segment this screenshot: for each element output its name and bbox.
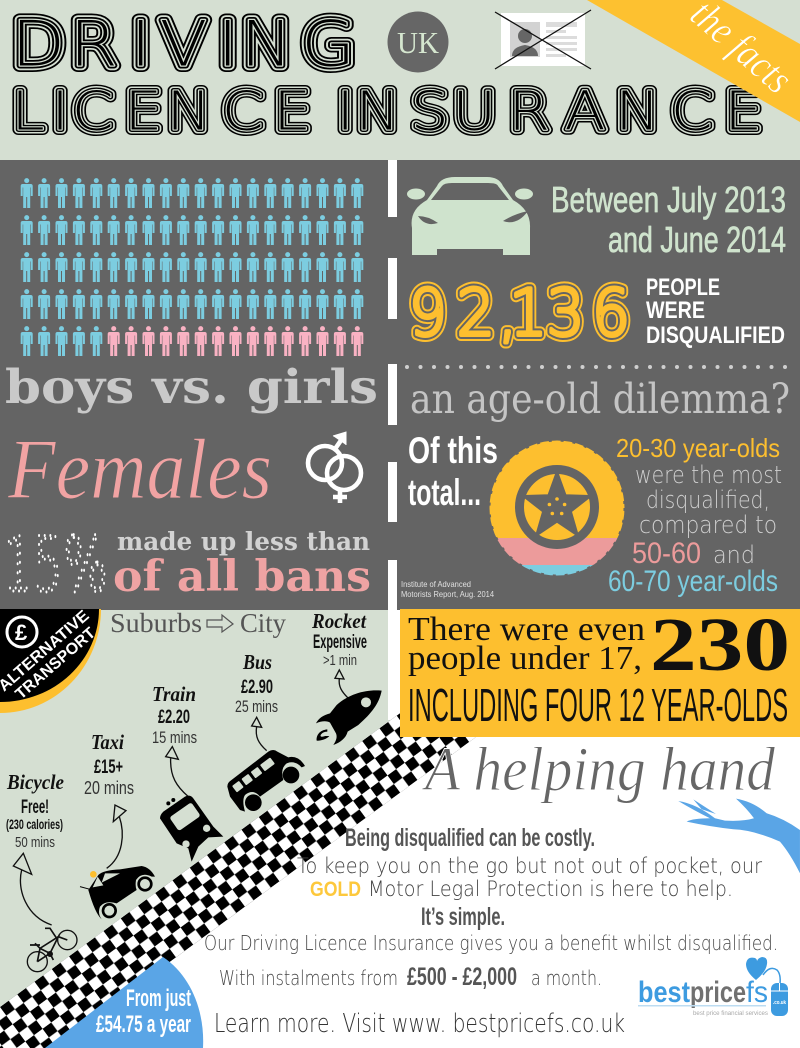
stat: 92,136: 92,136 (409, 276, 630, 351)
title: Licence Insurance: LICENCE INSURANCE (11, 81, 762, 143)
label: taxi: 20 mins (84, 778, 134, 798)
title: Driving: DRIVING (12, 8, 355, 81)
text: people were disqualified: PEOPLE (646, 274, 720, 301)
text: of this total (408, 430, 498, 513)
heading: suburbs to city (110, 608, 286, 638)
divider: dashed white (388, 160, 397, 610)
heading: a helping hand: A helping hand (421, 736, 776, 804)
text: gold motor legal protection: Motor Legal Protection is here to help. (368, 877, 733, 901)
title: Licence Insurance: LICENCE INSURANCE (11, 81, 762, 143)
logo: bestpricefs (638, 957, 788, 1017)
label: train: 15 mins (152, 729, 197, 747)
text: being disqualified can be costly: Being disqualified can be costly. (345, 824, 595, 852)
heading: boys vs. girls: boys vs. girls (5, 360, 378, 415)
text: 50-60 and: and (713, 541, 755, 569)
text: source citation (401, 579, 494, 599)
label: bus: Bus (242, 650, 272, 674)
banner: the facts (587, 0, 800, 122)
text: instalments: With instalments from (219, 966, 398, 990)
logo: bestpricefs: price (690, 976, 746, 1009)
text: were the most disqualified, compared to: disqualified, (646, 486, 770, 514)
text: 50-60 and: 50-60 (632, 537, 701, 570)
label: train: £2.20 (158, 707, 190, 728)
chart: pictogram of drivers by gender (21, 178, 363, 356)
text: people were disqualified: WERE (646, 297, 705, 324)
label: taxi (84, 730, 134, 798)
text: 50-60 and (632, 537, 755, 570)
logo: bestpricefs: .co.uk (773, 1000, 786, 1006)
badge: alternative transport: TRANSPORT (12, 624, 99, 703)
text: were the most disqualified, compared to: compared to (639, 511, 777, 539)
icon: bus (227, 750, 305, 812)
logo: bestpricefs: fs (746, 976, 768, 1009)
icon: blue hand (678, 799, 800, 873)
text: were the most disqualified, compared to (635, 461, 782, 539)
text: instalments: £500 - £2,000 (407, 963, 517, 991)
panel: white lower right background (0, 610, 800, 1048)
label: bus: £2.90 (241, 677, 273, 698)
icon: gender symbols (308, 432, 361, 503)
title: Driving: DRIVING (12, 8, 355, 81)
text: source citation: Motorists Report, Aug. 2014 (401, 589, 494, 599)
text: instalments: a month. (531, 966, 602, 990)
arrows: label pointers (13, 670, 348, 925)
title: Driving: DRIVING (12, 8, 355, 81)
text: learn more: Learn more. Visit www. bestpricefs.co.uk (214, 1009, 625, 1039)
stat: 15% dotted: 15% (3, 520, 108, 609)
text: it's simple: It’s simple. (421, 903, 505, 931)
icon: crossed-out licence card (495, 10, 591, 69)
stat: 92,136: 92,136 (409, 276, 630, 351)
text: source citation: Institute of Advanced (401, 579, 471, 589)
panel: yellow under-17 callout: people under 17, (408, 640, 642, 677)
text: to keep you on the go: To keep you on the go but not out of pocket, our (297, 854, 762, 878)
divider: dotted (407, 365, 786, 369)
title: Licence Insurance: LICENCE INSURANCE (11, 81, 762, 143)
panel: dark statistics background (0, 160, 800, 610)
label: bicycle: 50 mins (15, 834, 55, 851)
label: rocket: >1 min (323, 652, 357, 669)
label: taxi: £15+ (94, 757, 123, 778)
callout: from just price: £54.75 a year (96, 1011, 191, 1038)
panel: yellow under-17 callout: There were even (408, 611, 645, 648)
label: rocket: Expensive (313, 632, 367, 653)
label: bicycle: Free! (21, 797, 49, 818)
label: bicycle (6, 770, 64, 851)
icon: train (160, 796, 223, 862)
text: made up less than: made up less than (117, 527, 370, 556)
title: Driving: DRIVING (12, 8, 355, 81)
callout: from just price: From just (126, 985, 191, 1012)
label: taxi: Taxi (91, 730, 124, 754)
panel: yellow under-17 callout: 230 (650, 603, 790, 687)
text: gold motor legal protection: GOLD (310, 878, 361, 901)
checker road band (0, 652, 522, 1048)
icon: taxi (80, 866, 155, 919)
label: train: Train (152, 682, 196, 706)
title: Licence Insurance: LICENCE INSURANCE (11, 81, 762, 143)
title: Driving: DRIVING (12, 8, 355, 81)
stat: 92,136: 92,136 (409, 276, 630, 351)
label: rocket (311, 609, 367, 669)
text: of this total: total... (408, 472, 481, 513)
text: of all bans: of all bans (113, 552, 371, 602)
icon: car (407, 177, 533, 255)
label: rocket: Rocket (311, 609, 367, 633)
logo: bestpricefs: best (638, 976, 690, 1009)
badge: alternative transport: £ (15, 620, 28, 645)
heading: suburbs to city: City (240, 608, 286, 638)
icon: bicycle (27, 928, 77, 972)
icon: rocket (316, 690, 382, 745)
badge: UK (388, 12, 448, 72)
panel: yellow under-17 callout (400, 603, 800, 737)
text: people were disqualified (646, 274, 785, 349)
badge: UK: UK (397, 25, 440, 60)
text: of this total: Of this (408, 430, 498, 471)
label: bicycle: (230 calories) (6, 816, 63, 832)
text: instalments (219, 963, 602, 991)
callout: from just price (45, 957, 203, 1048)
label: bicycle: Bicycle (6, 770, 64, 794)
label: bus (235, 650, 278, 716)
label: train (152, 682, 197, 747)
heading: suburbs to city: Suburbs (110, 608, 202, 638)
label: bus: 25 mins (235, 698, 278, 716)
title: Licence Insurance: LICENCE INSURANCE (11, 81, 762, 143)
logo: bestpricefs: best price financial services (693, 1010, 769, 1017)
text: 20-30 year-olds: 20-30 year-olds (616, 433, 780, 463)
icon: tyre (489, 440, 625, 576)
text: Females: Females (7, 421, 272, 517)
